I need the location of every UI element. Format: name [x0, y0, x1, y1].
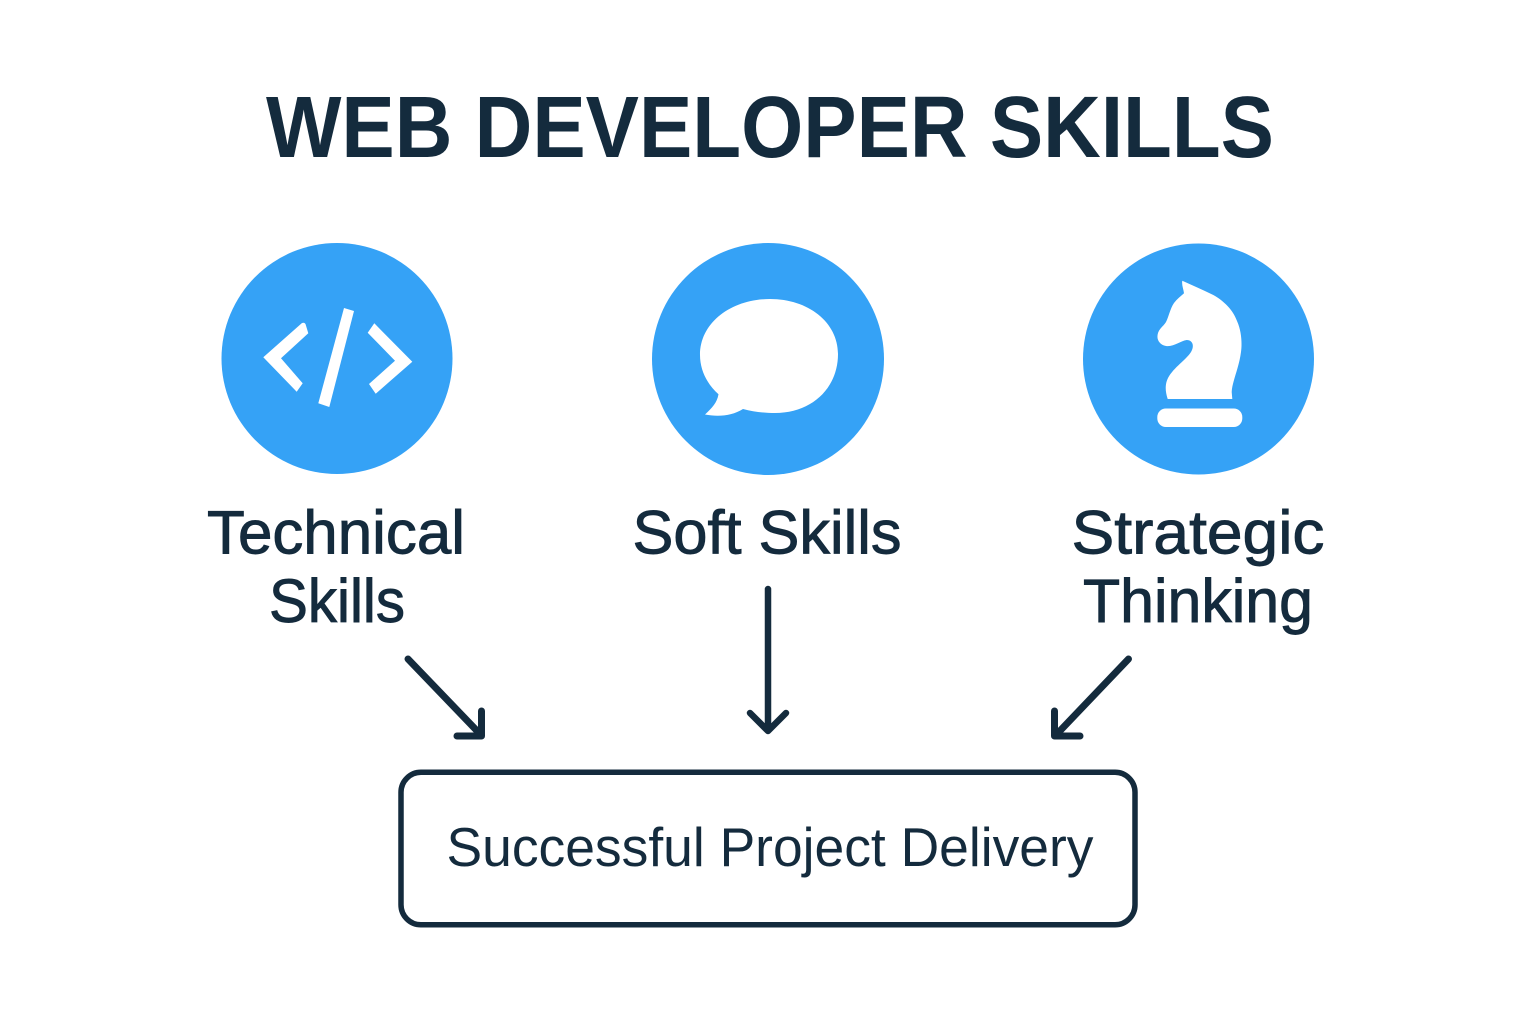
panel: soft skills	[632, 243, 902, 566]
icon: chess knight	[1083, 244, 1314, 474]
outcome box: successful project delivery	[401, 772, 1135, 925]
panel: technical skills	[207, 243, 465, 635]
icon: code brackets	[222, 243, 452, 474]
arrow: technical to delivery	[408, 659, 482, 736]
outcome box: successful project delivery: Successful Project Delivery	[446, 816, 1094, 878]
label: strategic thinking: Thinking	[1083, 567, 1313, 635]
label: strategic thinking: Strategic	[1072, 498, 1324, 566]
label: technical skills: Skills	[269, 567, 405, 635]
label: technical skills: Technical	[207, 498, 465, 566]
title: WEB DEVELOPER SKILLS	[266, 79, 1274, 176]
arrow: strategic to delivery	[1054, 659, 1128, 736]
label: soft skills: Soft Skills	[632, 498, 902, 566]
panel: strategic thinking	[1072, 244, 1324, 635]
icon: speech bubble	[652, 243, 884, 475]
arrow: soft skills to delivery	[750, 589, 786, 731]
